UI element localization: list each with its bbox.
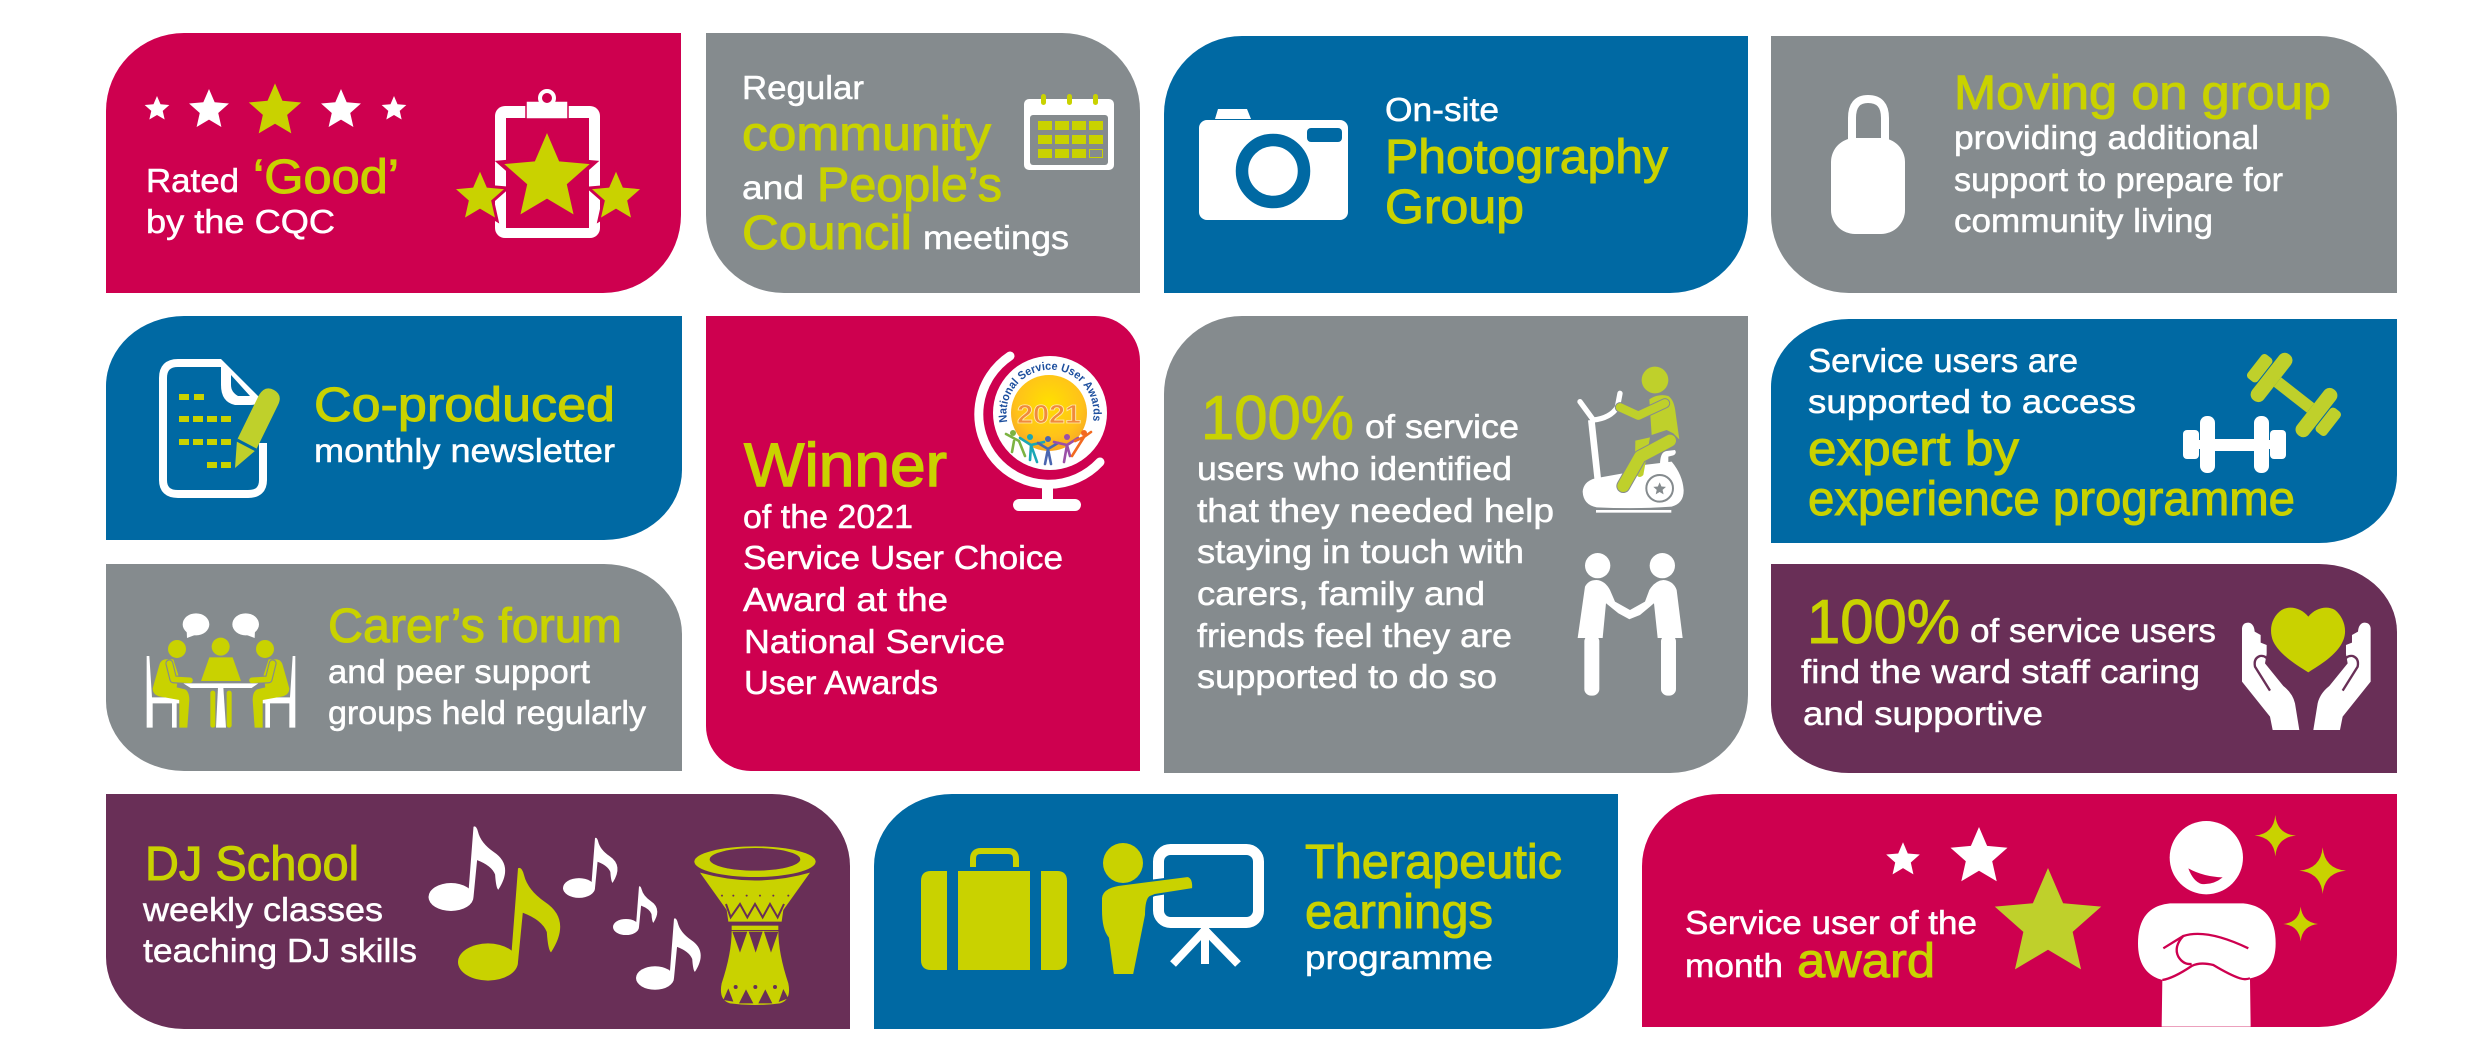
text: 100% of service users supported to stay in touch: friends feel they are bbox=[1197, 617, 1512, 654]
text: 100% of service users supported to stay in touch: supported to do so bbox=[1197, 658, 1497, 695]
icon: person on exercise bike bbox=[1580, 367, 1684, 513]
panel: 100% caring staff bbox=[1771, 564, 2397, 773]
text: co-produced monthly newsletter: monthly newsletter bbox=[314, 432, 615, 469]
text: community meetings: meetings bbox=[923, 219, 1069, 256]
text: expert by experience programme: expert by bbox=[1808, 423, 2019, 476]
text: moving on group: Moving on group bbox=[1954, 67, 2331, 120]
text: expert by experience programme bbox=[1808, 342, 2295, 526]
icon: dumbbells bbox=[2183, 341, 2351, 473]
text: 100% find ward staff caring bbox=[1801, 588, 2216, 732]
icon: presenter at board bbox=[1101, 843, 1258, 975]
text: 100% of service users supported to stay in touch: that they needed help bbox=[1197, 492, 1554, 529]
text: carer's forum: groups held regularly bbox=[328, 694, 647, 731]
text: community meetings: community bbox=[742, 108, 991, 161]
text: moving on group: providing additional bbox=[1954, 119, 2259, 156]
panel: service user of the month award bbox=[1642, 794, 2397, 1027]
text: carer's forum: and peer support bbox=[328, 653, 590, 690]
text: expert by experience programme: experience programme bbox=[1808, 473, 2295, 526]
text: service user of the month award: Service user of the bbox=[1685, 904, 1977, 941]
panel: rated good by the CQC bbox=[106, 33, 681, 293]
panel: therapeutic earnings programme bbox=[874, 794, 1618, 1029]
icon: suitcase bbox=[921, 851, 1067, 970]
icon: clipboard with stars bbox=[452, 91, 644, 238]
text: community meetings bbox=[742, 69, 1069, 260]
text: 100% of service users supported to stay in touch bbox=[1197, 384, 1554, 695]
text: service user of the month award: month bbox=[1685, 947, 1783, 984]
text: winner of the 2021 award: Award at the bbox=[743, 581, 948, 618]
panel: expert by experience programme bbox=[1771, 319, 2397, 543]
text: winner of the 2021 award: of the 2021 bbox=[743, 498, 913, 535]
text: 100% of service users supported to stay in touch: 100% bbox=[1201, 384, 1354, 453]
text: winner of the 2021 award bbox=[743, 431, 1063, 701]
text: 100% find ward staff caring: 100% bbox=[1807, 588, 1960, 657]
text: DJ School weekly classes: weekly classes bbox=[142, 891, 383, 928]
text: 100% find ward staff caring: find the ward staff caring bbox=[1801, 653, 2200, 690]
text: therapeutic earnings programme bbox=[1305, 836, 1562, 976]
text: 100% of service users supported to stay in touch: carers, family and bbox=[1197, 575, 1485, 612]
panel: carer's forum bbox=[106, 564, 682, 771]
icon: award globe badge: 2021 bbox=[1017, 399, 1081, 429]
icon: smiling person with folded arms bbox=[2138, 821, 2276, 1027]
text: winner of the 2021 award: Service User Choice bbox=[743, 539, 1063, 576]
text: rated good by the CQC bbox=[146, 151, 399, 240]
text: rated good by the CQC: Rated bbox=[146, 162, 239, 199]
text: carer's forum: Carer’s forum bbox=[328, 600, 622, 653]
icon: calendar bbox=[1024, 94, 1114, 170]
text: DJ School weekly classes: DJ School bbox=[145, 838, 359, 891]
text: on-site photography group: On-site bbox=[1385, 91, 1499, 128]
text: on-site photography group: Photography bbox=[1385, 131, 1668, 184]
text: community meetings: Council bbox=[742, 207, 912, 260]
panel: moving on group bbox=[1771, 36, 2397, 293]
text: 100% find ward staff caring: of service users bbox=[1970, 612, 2216, 649]
text: 100% find ward staff caring: and supportive bbox=[1803, 695, 2043, 732]
text: DJ School weekly classes bbox=[142, 838, 417, 969]
text: expert by experience programme: supported to access bbox=[1808, 383, 2136, 420]
icon: award globe badge bbox=[974, 352, 1107, 511]
panel: co-produced newsletter bbox=[106, 316, 682, 540]
text: therapeutic earnings programme: earnings bbox=[1305, 886, 1493, 939]
text: therapeutic earnings programme: Therapeutic bbox=[1305, 836, 1562, 889]
icon: row of five stars bbox=[145, 83, 406, 133]
text: moving on group: support to prepare for bbox=[1954, 161, 2283, 198]
panel: on-site Photography Group bbox=[1164, 36, 1748, 293]
panel: 100% stay in touch bbox=[1164, 316, 1748, 773]
text: rated good by the CQC: by the CQC bbox=[146, 203, 335, 240]
text: winner of the 2021 award: National Service bbox=[744, 623, 1005, 660]
text: rated good by the CQC: ‘Good’ bbox=[253, 151, 399, 204]
panel: award winner bbox=[706, 316, 1140, 771]
text: service user of the month award bbox=[1685, 904, 1977, 988]
icon: camera bbox=[1199, 109, 1348, 220]
icon: music notes bbox=[428, 826, 701, 990]
icon: sparkles bbox=[2255, 815, 2346, 941]
icon: hands holding heart bbox=[2242, 608, 2371, 730]
icon: two people shaking hands bbox=[1578, 553, 1683, 696]
text: co-produced monthly newsletter bbox=[314, 379, 615, 469]
text: winner of the 2021 award: User Awards bbox=[744, 664, 938, 701]
text: 100% of service users supported to stay in touch: of service bbox=[1365, 408, 1519, 445]
text: moving on group bbox=[1954, 67, 2331, 239]
text: service user of the month award: award bbox=[1797, 935, 1935, 988]
text: therapeutic earnings programme: programme bbox=[1305, 939, 1493, 976]
icon: djembe drum bbox=[694, 846, 816, 1005]
icon: people around a table bbox=[147, 613, 295, 728]
text: winner of the 2021 award: Winner bbox=[744, 431, 947, 499]
text: community meetings: and bbox=[742, 169, 804, 206]
text: moving on group: community living bbox=[1954, 202, 2213, 239]
text: carer's forum bbox=[328, 600, 647, 731]
icon: document and pencil bbox=[163, 359, 280, 494]
panel: community and People's Council meetings bbox=[706, 33, 1140, 293]
panel: DJ School bbox=[106, 794, 850, 1029]
text: community meetings: Regular bbox=[742, 69, 864, 106]
text: 100% of service users supported to stay in touch: staying in touch with bbox=[1197, 533, 1524, 570]
icon: award globe badge: National Service User Awards bbox=[998, 362, 1102, 422]
text: DJ School weekly classes: teaching DJ skills bbox=[143, 932, 417, 969]
text: community meetings: People’s bbox=[817, 159, 1002, 212]
text: expert by experience programme: Service users are bbox=[1808, 342, 2078, 379]
icon: padlock bbox=[1831, 99, 1905, 234]
icon: three stars bbox=[1886, 827, 2101, 969]
text: 100% of service users supported to stay in touch: users who identified bbox=[1197, 450, 1512, 487]
text: on-site photography group bbox=[1385, 91, 1668, 234]
text: on-site photography group: Group bbox=[1385, 181, 1524, 234]
text: co-produced monthly newsletter: Co-produced bbox=[314, 379, 615, 432]
